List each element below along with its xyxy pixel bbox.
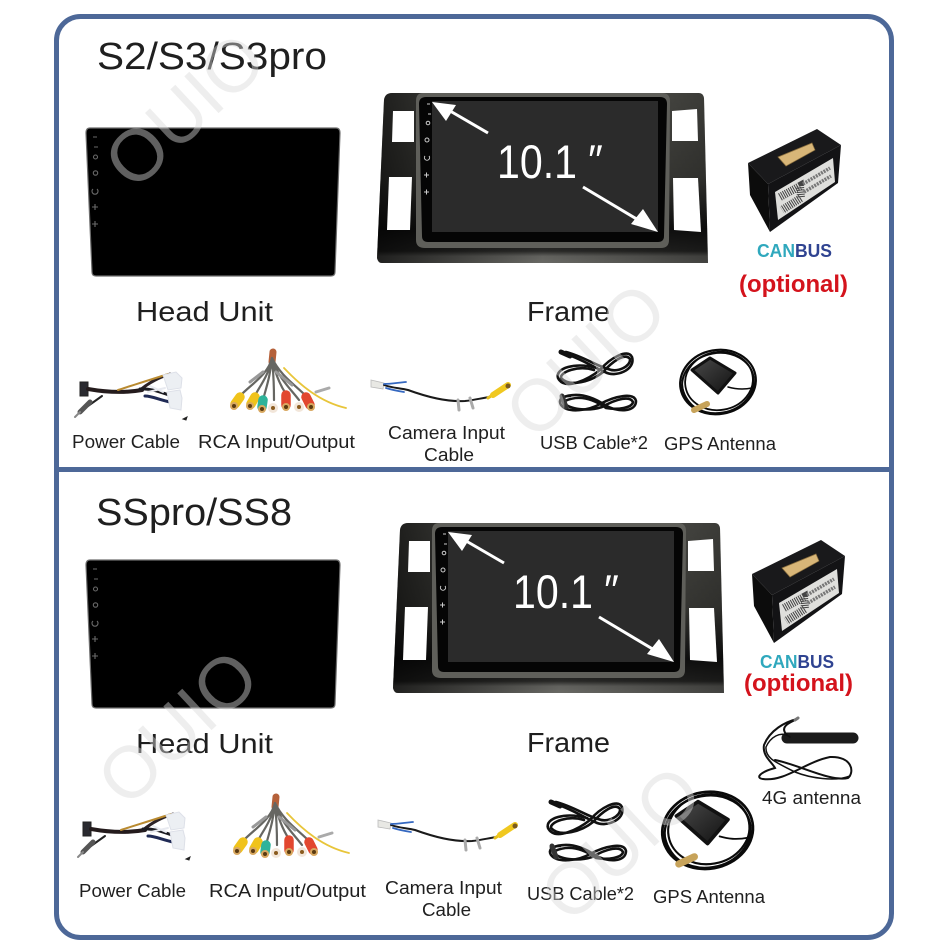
icon: RCA cable <box>233 797 349 858</box>
frame image <box>377 93 708 263</box>
optional label: (optional) <box>744 670 853 697</box>
heading: SSpro/SS8: SSpro/SS8 <box>96 492 292 534</box>
screen size label: 10.1 <box>513 565 593 618</box>
icon: camera cable <box>378 820 518 850</box>
icon: 4G antenna <box>759 718 853 779</box>
icon: GPS antenna <box>656 785 759 876</box>
frame label: Frame <box>527 727 610 758</box>
frame label: Frame <box>527 296 610 327</box>
USB label: USB Cable*2 <box>540 433 648 453</box>
camera label <box>388 423 505 465</box>
divider between the two product panels <box>57 467 891 472</box>
head unit image <box>86 128 340 276</box>
camera label <box>385 878 502 920</box>
panel: S2/S3/S3pro <box>72 36 848 465</box>
icon: power cable <box>78 812 190 860</box>
icon: USB cables <box>548 802 626 860</box>
camera label: Cable <box>424 445 474 465</box>
GPS label: GPS Antenna <box>664 434 777 454</box>
head unit label: Head Unit <box>136 728 273 759</box>
panel: SSpro/SS8 <box>78 492 862 920</box>
icon: power cable <box>75 372 187 420</box>
canbus label: CANBUS <box>760 651 834 672</box>
head unit label: Head Unit <box>136 296 273 327</box>
canbus box image <box>748 129 841 232</box>
size arrows <box>432 102 658 232</box>
heading: S2/S3/S3pro: S2/S3/S3pro <box>97 36 327 78</box>
screen size label: ″ <box>602 566 619 613</box>
frame image <box>393 523 724 693</box>
icon: USB cables <box>558 352 636 410</box>
camera label: Camera Input <box>385 878 502 898</box>
screen size label: ″ <box>586 136 603 183</box>
watermark: lower middle: OUIO <box>525 751 717 937</box>
RCA label: RCA Input/Output <box>209 881 366 901</box>
GPS label: GPS Antenna <box>653 887 766 907</box>
canbus label: CANBUS <box>757 240 832 261</box>
watermark: lower left: OUIO <box>82 635 274 821</box>
size arrows <box>448 532 674 662</box>
USB label: USB Cable*2 <box>527 884 634 904</box>
power cable label: Power Cable <box>79 881 186 901</box>
icon: camera cable <box>371 380 510 410</box>
RCA label: RCA Input/Output <box>198 432 355 452</box>
power cable label: Power Cable <box>72 432 180 452</box>
screen size label: 10.1 <box>497 135 577 188</box>
icon: GPS antenna <box>675 344 761 420</box>
canbus box image <box>752 540 845 643</box>
icon: RCA cable <box>230 352 346 413</box>
camera label: Camera Input <box>388 423 505 443</box>
watermark: upper middle: OUIO <box>490 268 682 454</box>
optional label: (optional) <box>739 271 848 298</box>
watermark: top left: OUIO <box>89 18 281 204</box>
4G antenna label: 4G antenna <box>762 788 862 808</box>
camera label: Cable <box>422 900 471 920</box>
head unit image <box>86 560 340 708</box>
